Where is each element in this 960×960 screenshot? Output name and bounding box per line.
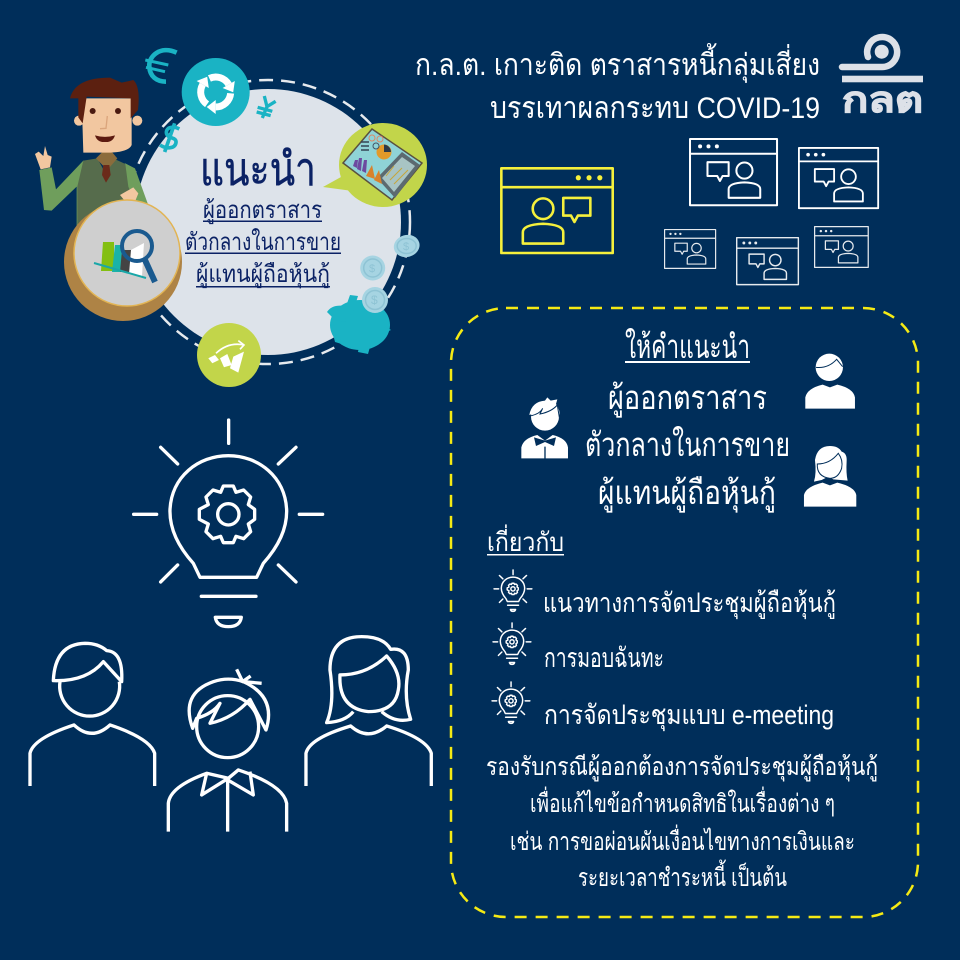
panel: advice dashed box bbox=[451, 308, 918, 917]
text: explanation paragraph: เช่น การขอผ่อนผันเงื่อนไขทางการเงินและ bbox=[510, 824, 855, 856]
title bbox=[415, 43, 820, 125]
logo: SEC Thailand: กลต bbox=[842, 79, 923, 120]
icon: yen bbox=[257, 96, 276, 118]
icon: coins and piggy bank bbox=[327, 232, 422, 354]
title: ก.ล.ต. เกาะติด ตราสารหนี้กลุ่มเสี่ยง bbox=[415, 43, 820, 84]
icon: coins and piggy bank: $ bbox=[371, 293, 378, 307]
text: shareholder meeting guideline: แนวทางการจัดประชุมผู้ถือหุ้นกู้ bbox=[543, 588, 836, 620]
text: explanation paragraph: เพื่อแก้ไขข้อกำหนดสิทธิในเรื่องต่าง ๆ bbox=[530, 786, 835, 818]
icon: video call window 5 bbox=[815, 227, 868, 267]
text: bondholder representatives: ผู้แทนผู้ถือหุ้นกู้ bbox=[598, 474, 776, 513]
text: explanation paragraph bbox=[486, 753, 878, 892]
icon: yellow video call window bbox=[501, 168, 613, 253]
icon: chart tablet bubble bbox=[323, 123, 427, 207]
panel: recommendation circle bbox=[126, 80, 410, 364]
icon: teal recycle circle bbox=[182, 58, 250, 126]
illustration: presenter character bbox=[35, 78, 151, 233]
text: explanation paragraph: ระยะเวลาชำระหนี้ เป็นต้น bbox=[578, 859, 787, 892]
text: explanation paragraph: รองรับกรณีผู้ออกต้องการจัดประชุมผู้ถือหุ้นกู้ bbox=[486, 753, 878, 782]
icon: bulb 1 bbox=[494, 570, 532, 611]
icon: person with bow tie bbox=[521, 397, 568, 458]
text: issuers: ผู้ออกตราสาร bbox=[608, 379, 767, 418]
text: e-meeting: การจัดประชุมแบบ e-meeting bbox=[544, 700, 834, 732]
icon: large lightbulb with gear bbox=[134, 420, 323, 627]
text: issuers: ผู้ออกตราสาร bbox=[203, 197, 322, 225]
icon: outline person center bbox=[168, 669, 287, 832]
text: selling agents: ตัวกลางในการขาย bbox=[585, 426, 790, 463]
text: proxy: การมอบฉันทะ bbox=[544, 643, 664, 673]
icon: bulb 2 bbox=[493, 623, 531, 664]
text: bondholder representatives: ผู้แทนผู้ถือหุ้นกู้ bbox=[196, 261, 330, 289]
icon: coins and piggy bank: $ bbox=[369, 263, 375, 275]
icon: person female bbox=[804, 446, 856, 507]
text: selling agents: ตัวกลางในการขาย bbox=[185, 228, 341, 256]
icon: euro bbox=[145, 50, 177, 82]
icon: video call window 4 bbox=[737, 238, 798, 285]
heading: give advice: ให้คำแนะนำ bbox=[625, 328, 750, 365]
icon: person male bbox=[805, 354, 855, 409]
icon: outline person right bbox=[306, 637, 431, 786]
icon: growth chart circle bbox=[197, 323, 261, 387]
icon: outline person left bbox=[30, 643, 155, 786]
icon: dollar bbox=[160, 123, 179, 152]
heading: give advice bbox=[625, 328, 750, 365]
icon: video call window 1 bbox=[690, 139, 777, 205]
title: บรรเทาผลกระทบ COVID-19 bbox=[490, 92, 820, 125]
heading: recommend: แนะนำ bbox=[200, 143, 316, 195]
icon: magnifier on chart bbox=[64, 200, 182, 321]
heading: regarding: เกี่ยวกับ bbox=[487, 524, 564, 557]
icon: coins and piggy bank: $ bbox=[403, 241, 409, 253]
icon: video call window 2 bbox=[799, 148, 878, 208]
icon: video call window 3 bbox=[665, 230, 716, 268]
logo: SEC Thailand bbox=[842, 37, 923, 120]
icon: bulb 3 bbox=[492, 682, 530, 723]
